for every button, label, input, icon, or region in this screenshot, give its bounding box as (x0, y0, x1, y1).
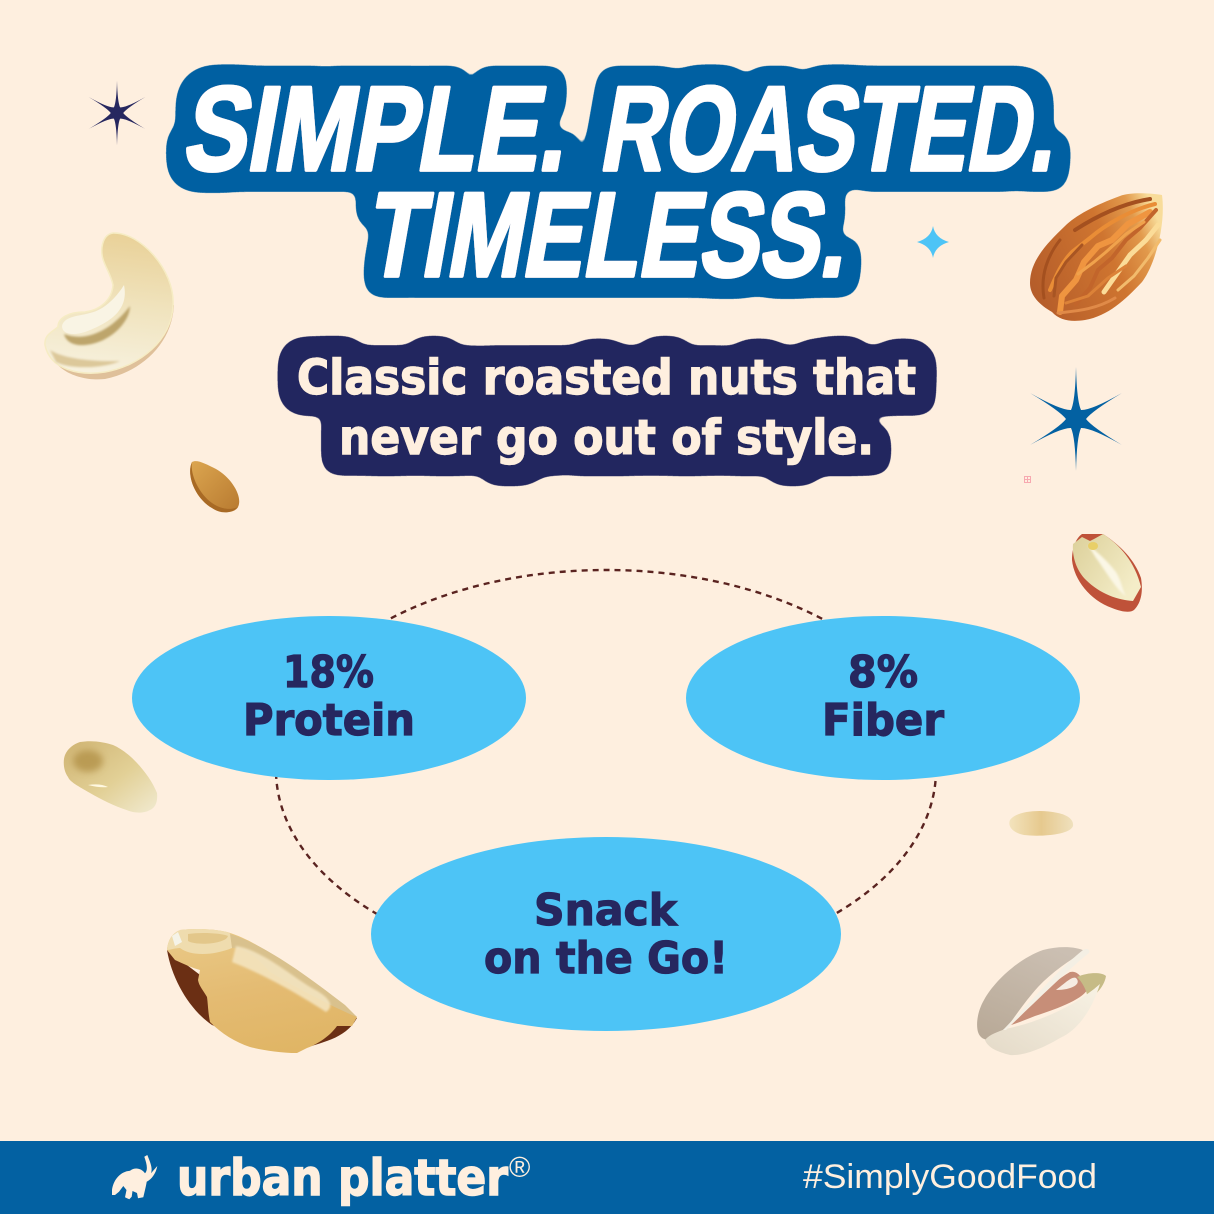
callout: protein: 18% (283, 647, 374, 698)
small marker (1024, 476, 1030, 482)
icon: elephant logo (112, 1155, 157, 1199)
icon: light blue sparkle (917, 226, 949, 258)
dashed connector (276, 570, 936, 970)
callout: protein: Protein (243, 695, 415, 746)
callout: snack: Snack (534, 885, 679, 936)
nut: peanut (1072, 534, 1142, 612)
callout: fiber: 8% (848, 647, 918, 698)
nut: blanched kernel (64, 741, 157, 813)
subtitle (297, 350, 916, 466)
title: SIMPLE. (176, 62, 582, 196)
brand name: urban platter (177, 1149, 508, 1207)
icon: blue sparkle (1030, 367, 1122, 471)
nut: sliver (1009, 811, 1073, 836)
callout: snack (371, 837, 841, 1031)
icon: navy sparkle (88, 81, 146, 145)
callout: snack: on the Go! (484, 933, 728, 984)
subtitle: Classic roasted nuts that (297, 350, 916, 406)
subtitle: never go out of style. (339, 410, 874, 466)
nut: cashew (45, 233, 174, 379)
nut: almond (1030, 193, 1163, 321)
title: TIMELESS. (359, 168, 862, 302)
nut: pistachio (977, 947, 1106, 1055)
footer bar (0, 1141, 1214, 1214)
callout: fiber (686, 616, 1080, 780)
callout: fiber: Fiber (822, 695, 944, 746)
callout: protein (132, 616, 526, 780)
nut: brazil (167, 929, 357, 1053)
title (176, 62, 1071, 302)
registered mark: ® (509, 1152, 530, 1184)
nut: seed (190, 461, 239, 512)
hashtag: #SimplyGoodFood (803, 1158, 1097, 1196)
